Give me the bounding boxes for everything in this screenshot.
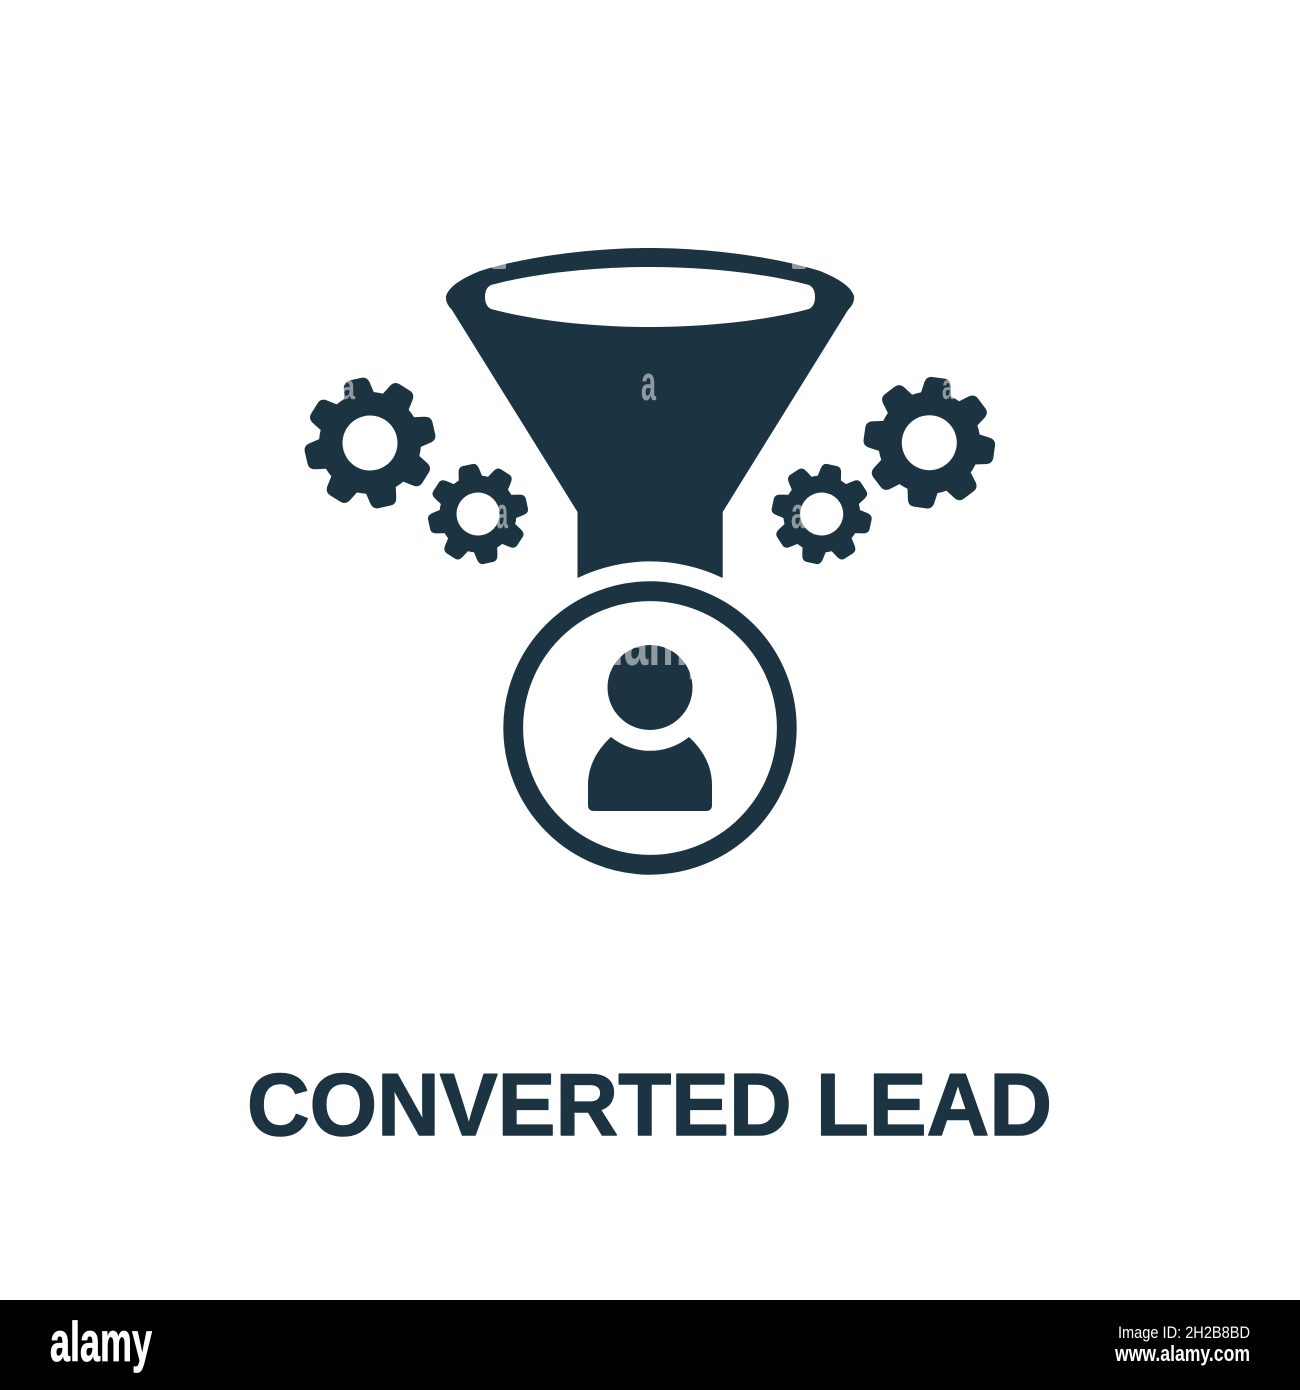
- watermark marks over the icon: [340, 263, 955, 680]
- icon: small left gear: [419, 455, 537, 573]
- website: www.alamy.com: [1114, 1341, 1250, 1366]
- title: CONVERTED LEAD: [247, 1055, 1052, 1154]
- icon: person in circle: [513, 591, 787, 865]
- footer bar: [0, 1300, 1300, 1390]
- watermark marks over the icon: a: [942, 366, 955, 407]
- watermark marks over the icon: alamy: [587, 602, 712, 680]
- icon: small right gear: [762, 455, 881, 573]
- watermark marks over the icon: a: [496, 489, 508, 538]
- watermark marks over the icon: a: [641, 357, 656, 411]
- watermark marks over the icon: a: [340, 366, 356, 407]
- footer logo: alamy: [50, 1310, 152, 1373]
- icon: funnel: [446, 248, 854, 578]
- icon: large left gear: [291, 364, 449, 522]
- image id: Image ID: 2H2B8BD: [1118, 1323, 1250, 1342]
- icon: large right gear: [855, 369, 1003, 517]
- watermark marks over the icon: a: [791, 489, 805, 538]
